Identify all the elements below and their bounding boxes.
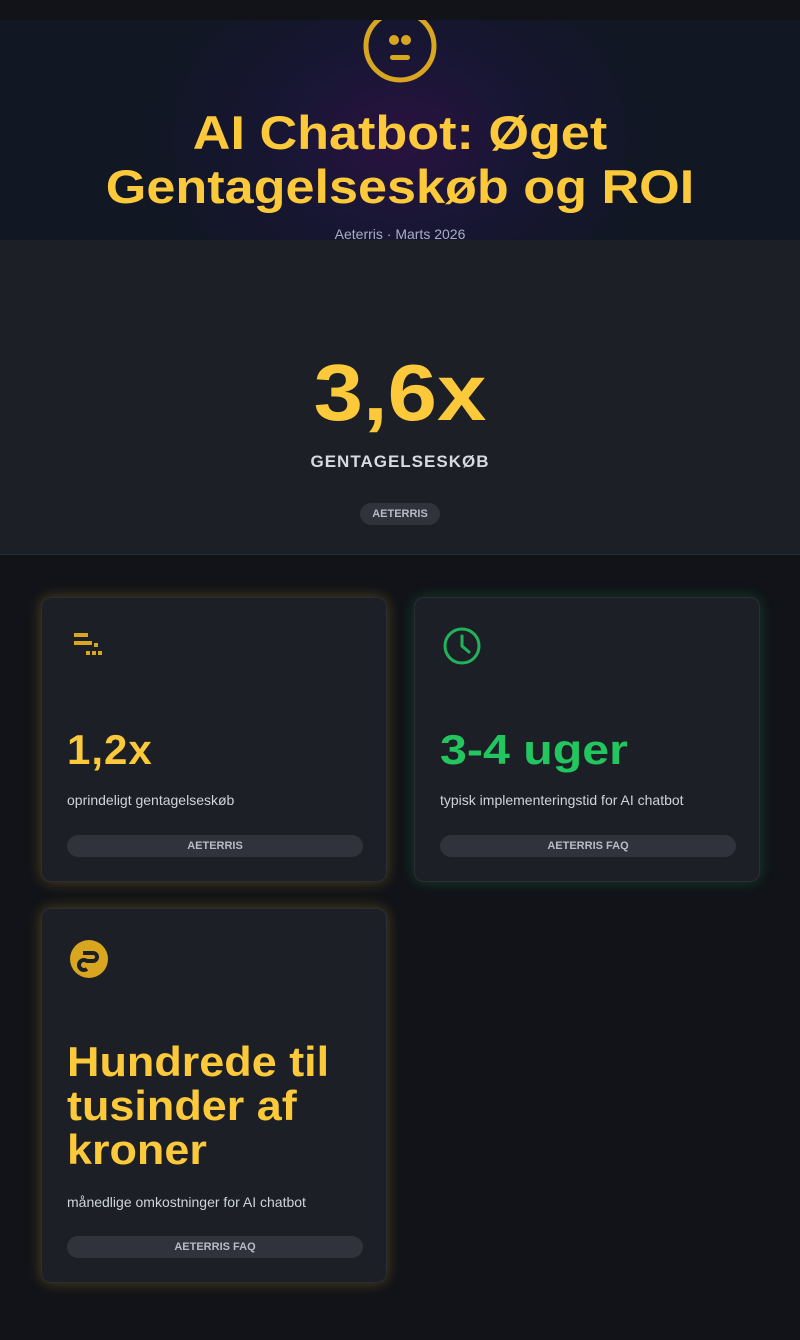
- source pill: AETERRIS: [372, 508, 428, 520]
- value: [67, 1038, 329, 1173]
- description: oprindeligt gentagelseskøb: [67, 792, 234, 808]
- title: [106, 106, 694, 213]
- subtitle: Aeterris · Marts 2026: [335, 226, 465, 242]
- description: månedlige omkostninger for AI chatbot: [67, 1194, 306, 1210]
- big number: 3,6x: [314, 348, 486, 437]
- source: AETERRIS: [187, 840, 243, 852]
- icon: coin: [70, 940, 108, 978]
- icon: clock: [444, 628, 480, 664]
- source: [67, 1236, 363, 1258]
- value: 3-4 uger: [440, 726, 628, 773]
- card: 3-4 uger: [414, 597, 760, 882]
- value: kroner: [67, 1126, 207, 1173]
- source pill: [360, 503, 440, 525]
- hero header: [0, 20, 800, 240]
- source: AETERRIS FAQ: [547, 840, 629, 852]
- panel: main stat: [0, 240, 800, 555]
- icon: pixel: [74, 633, 102, 655]
- value: Hundrede til: [67, 1038, 329, 1085]
- source: AETERRIS FAQ: [174, 1241, 256, 1253]
- stat label: GENTAGELSESKØB: [310, 452, 489, 471]
- card: 1,2x: [41, 597, 387, 882]
- title: AI Chatbot: Øget: [193, 106, 607, 159]
- icon: face: [364, 20, 436, 82]
- source: [440, 835, 736, 857]
- title: Gentagelseskøb og ROI: [106, 160, 694, 213]
- value: tusinder af: [67, 1082, 297, 1129]
- card: kroner: [41, 908, 387, 1283]
- description: typisk implementeringstid for AI chatbot: [440, 792, 684, 808]
- source: [67, 835, 363, 857]
- value: 1,2x: [67, 726, 153, 773]
